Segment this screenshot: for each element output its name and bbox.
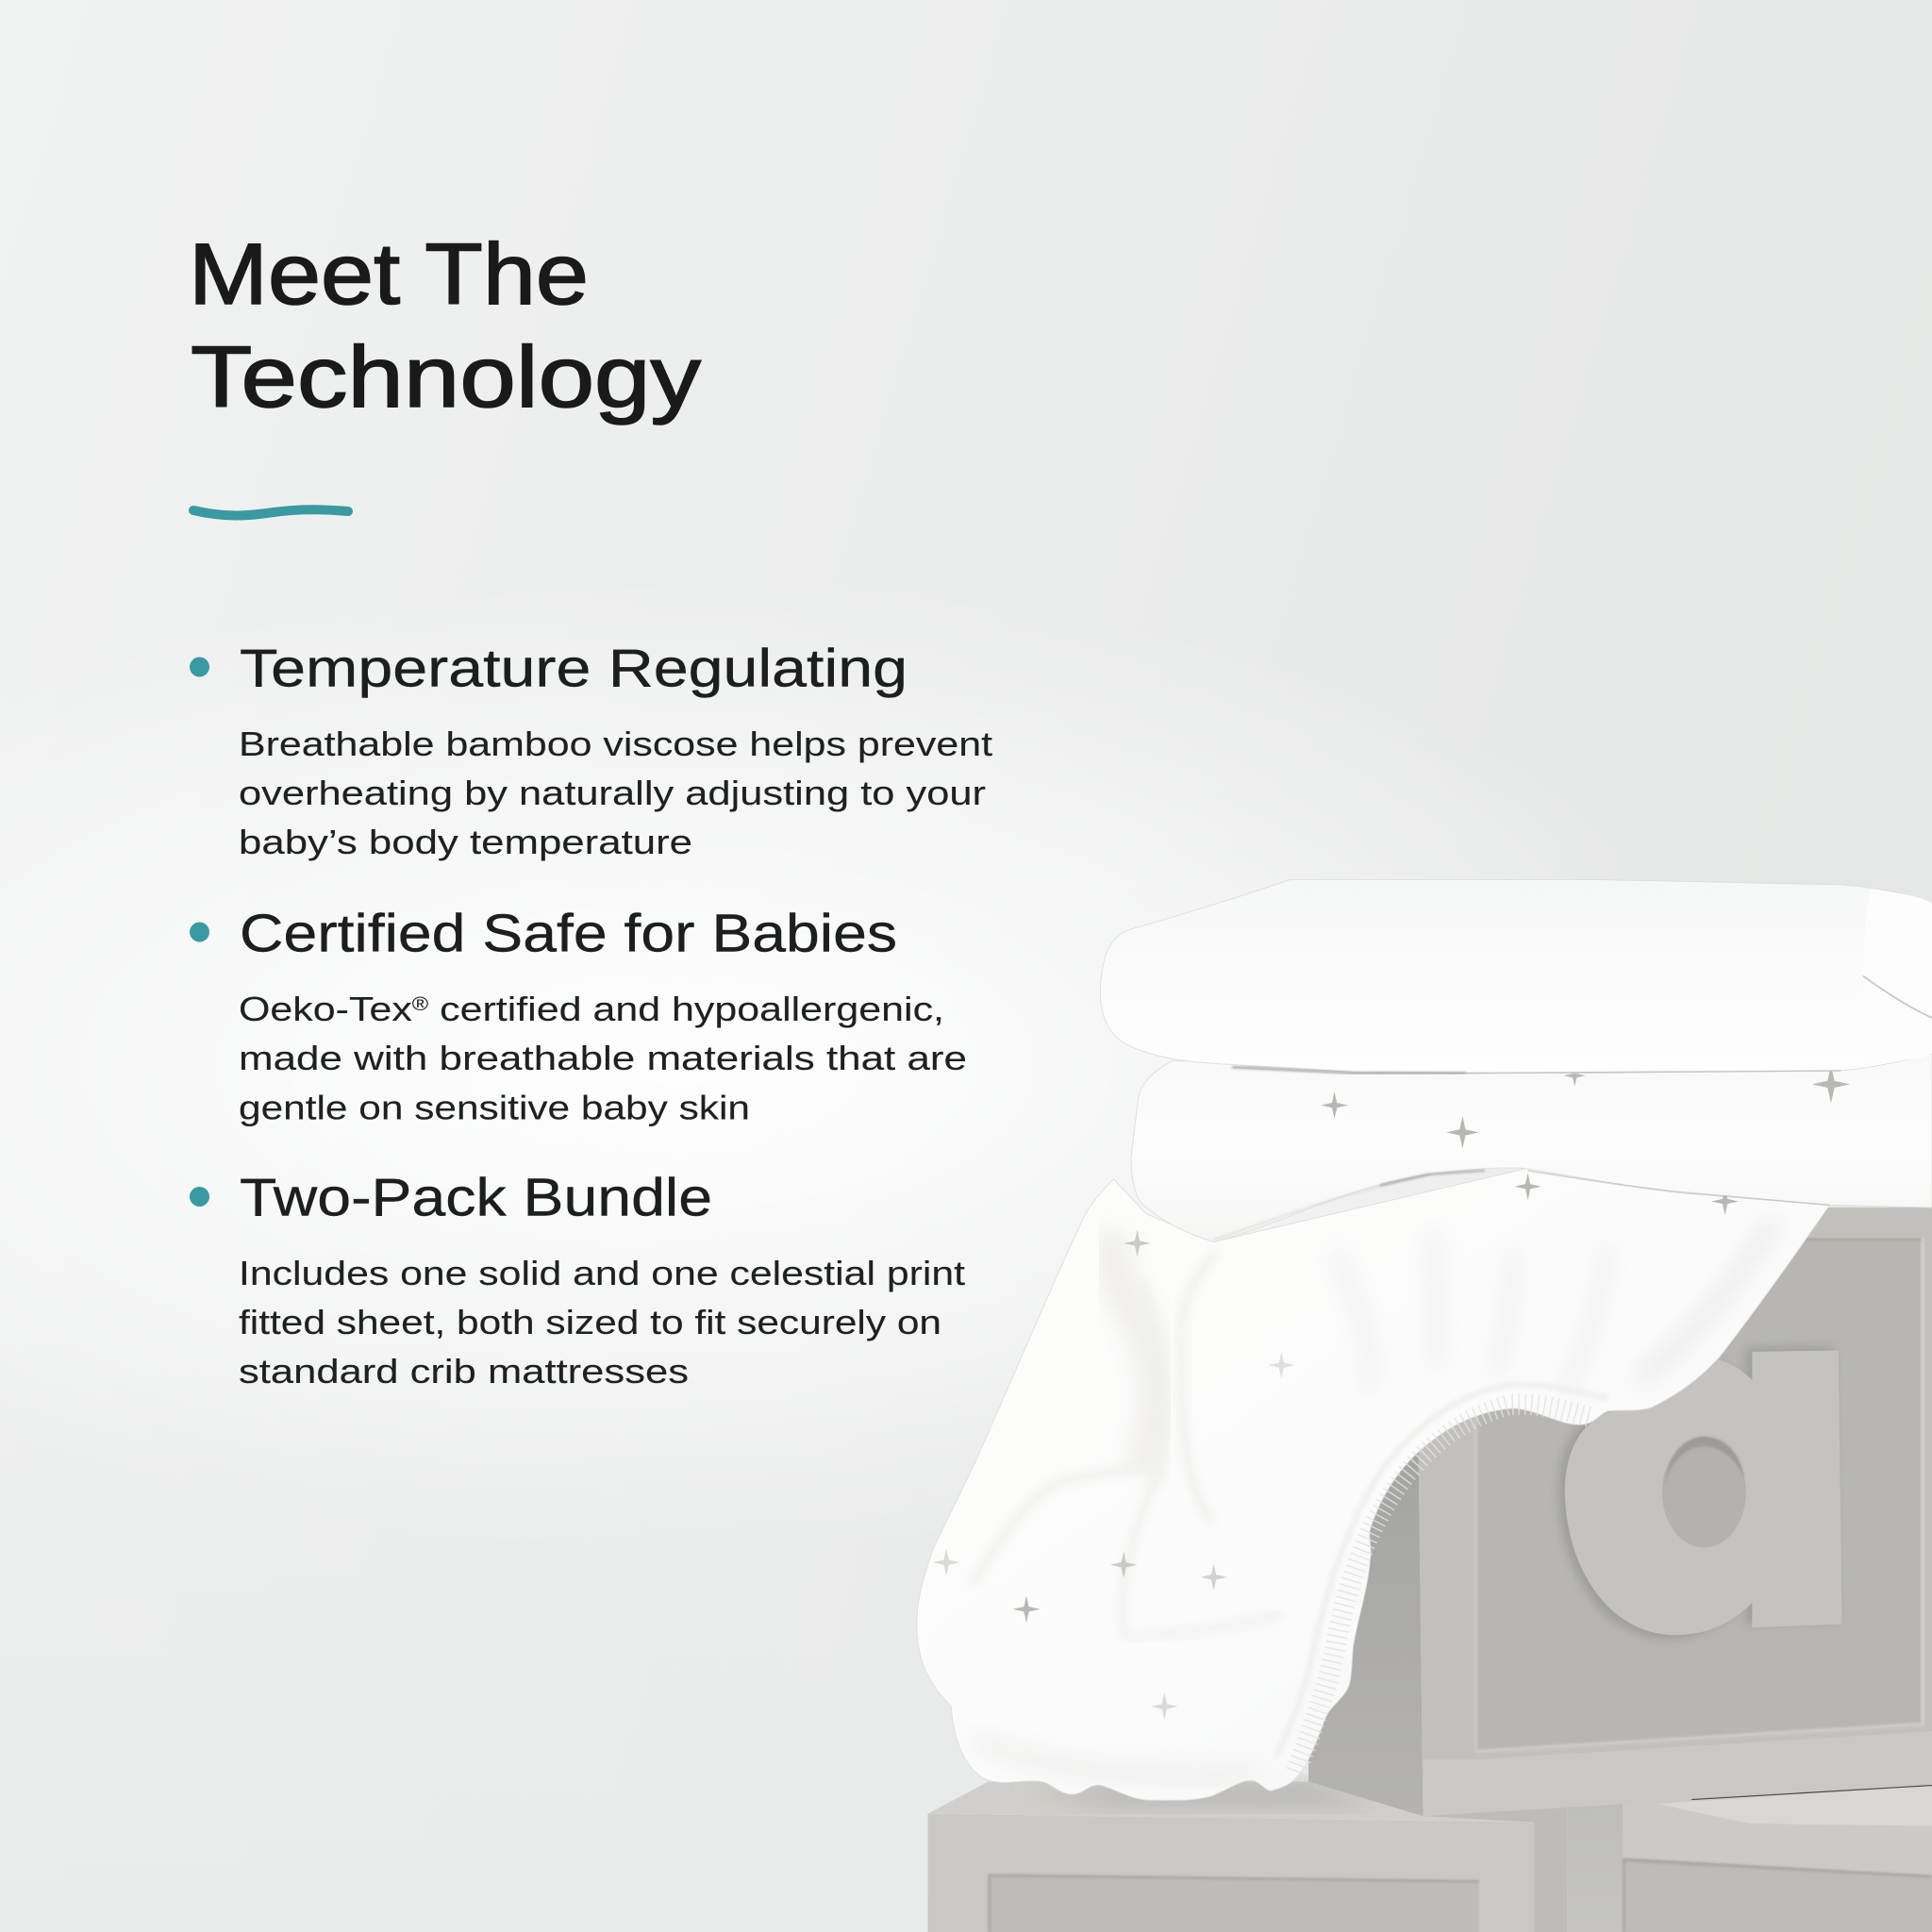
title: Technology	[191, 329, 701, 425]
accent underline	[193, 509, 348, 515]
bullet	[190, 1187, 209, 1207]
description: ®	[412, 994, 428, 1015]
folded sheet: celestial print	[1131, 1047, 1932, 1242]
letter a	[1558, 1347, 1842, 1639]
description	[239, 990, 967, 1126]
description: standard crib mattresses	[239, 1352, 689, 1391]
feature: certified safe	[190, 904, 967, 1126]
description: gentle on sensitive baby skin	[239, 1089, 750, 1126]
bullet	[190, 657, 209, 677]
bullet	[190, 923, 209, 941]
star print on folded sheet	[1321, 1065, 1850, 1149]
block: lower left	[928, 1782, 1567, 1932]
description	[239, 724, 992, 861]
description: fitted sheet, both sized to fit securely on	[239, 1303, 941, 1341]
fitted sheet draped	[917, 1168, 1830, 1800]
block: lower right	[1567, 1783, 1932, 1932]
description: Includes one solid and one celestial print	[239, 1254, 965, 1292]
folded sheet: solid white	[1100, 880, 1932, 1074]
description: Oeko-Tex	[239, 990, 386, 1028]
heading: Certified Safe for Babies	[240, 904, 897, 964]
block: upper with letter a	[1308, 1208, 1932, 1816]
elastic gather	[1276, 1385, 1607, 1772]
description: baby’s body temperature	[239, 823, 692, 861]
heading: Two-Pack Bundle	[240, 1168, 712, 1228]
photo: stacked crib sheets on letter blocks	[917, 880, 1932, 1932]
description: overheating by naturally adjusting to your	[239, 774, 986, 812]
feature: two-pack bundle	[190, 1168, 965, 1391]
title: Meet The	[189, 226, 589, 323]
description: made with breathable materials that are	[239, 1039, 967, 1077]
heading: Temperature Regulating	[240, 638, 908, 698]
feature: temperature regulating	[190, 638, 992, 861]
description: Breathable bamboo viscose helps prevent	[239, 724, 992, 763]
star print on fitted sheet	[933, 1173, 1739, 1720]
title	[189, 226, 701, 425]
description: certified and hypoallergenic,	[428, 990, 944, 1028]
description	[239, 1254, 965, 1391]
